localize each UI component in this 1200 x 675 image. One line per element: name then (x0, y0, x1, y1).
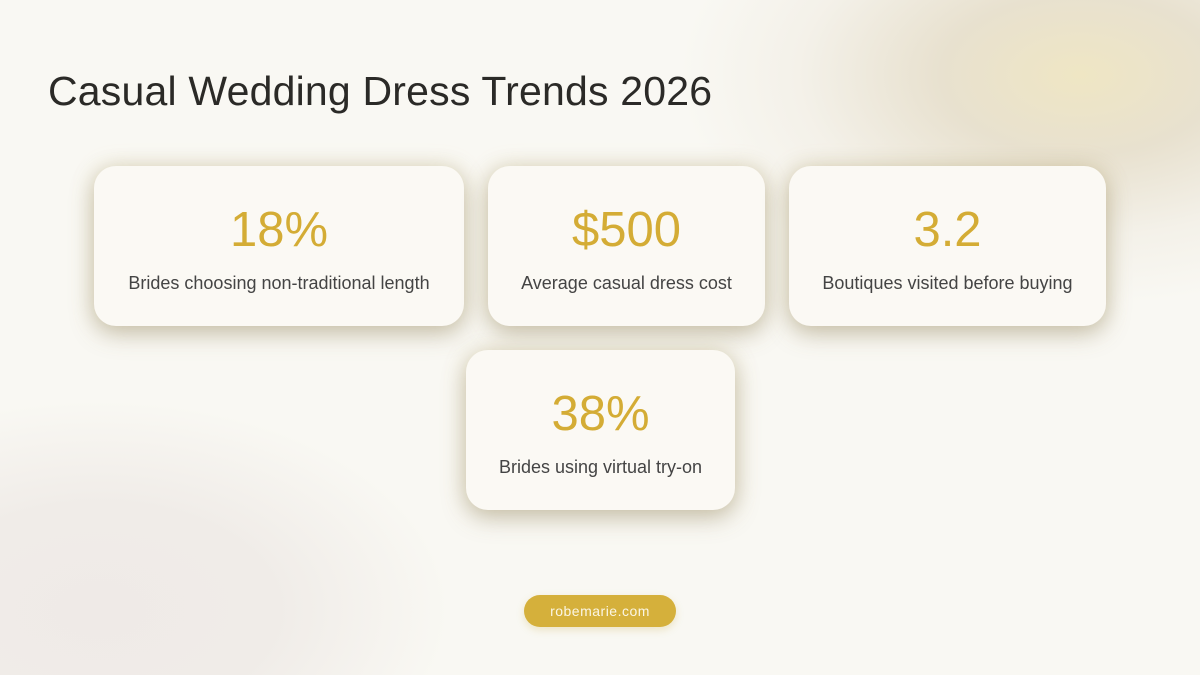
card: non-traditional length: 18% (230, 203, 328, 257)
card: virtual try-on: Brides using virtual try-on (499, 457, 702, 477)
card: dress cost: $500 (572, 203, 681, 257)
card: non-traditional length: Brides choosing non-traditional length (128, 273, 430, 293)
card: virtual try-on (466, 350, 735, 510)
card: non-traditional length (94, 166, 464, 326)
card: dress cost: Average casual dress cost (521, 273, 732, 293)
footer pill: robemarie.com (550, 603, 650, 619)
card: boutiques (789, 166, 1106, 326)
title: Casual Wedding Dress Trends 2026 (48, 68, 712, 114)
card: dress cost (488, 166, 765, 326)
footer pill (524, 595, 676, 627)
card: virtual try-on: 38% (551, 387, 650, 441)
card: boutiques: 3.2 (913, 203, 982, 257)
card: boutiques: Boutiques visited before buying (822, 273, 1073, 293)
